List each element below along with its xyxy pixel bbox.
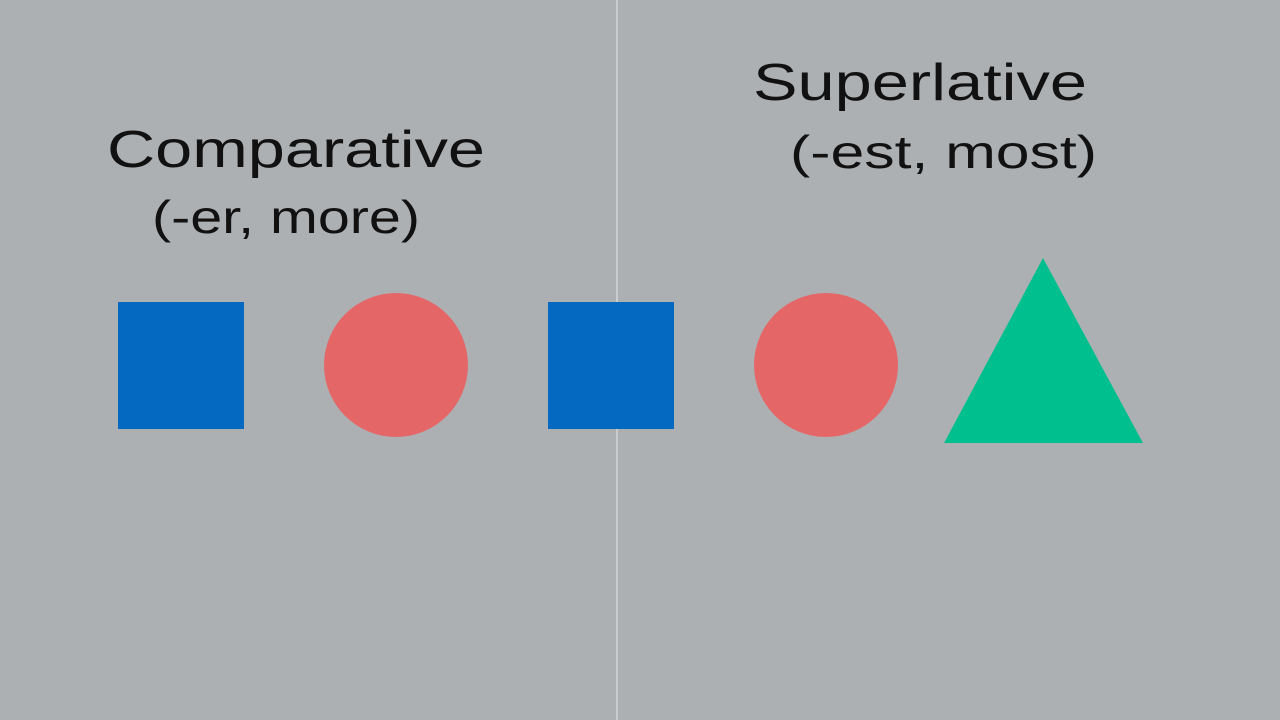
icon: green triangle xyxy=(944,258,1143,443)
heading: Superlative: (-est, most) xyxy=(790,126,1097,178)
icon: red circle 1 xyxy=(324,293,468,437)
icon: red circle 2 xyxy=(754,293,898,437)
heading: Comparative: (-er, more) xyxy=(152,191,420,243)
heading: Comparative xyxy=(107,121,485,243)
icon: blue square 1 xyxy=(118,302,244,429)
heading: Superlative: Superlative xyxy=(753,54,1087,112)
icon: blue square 2 xyxy=(548,302,674,429)
heading: Superlative xyxy=(753,54,1097,178)
heading: Comparative: Comparative xyxy=(107,121,485,179)
